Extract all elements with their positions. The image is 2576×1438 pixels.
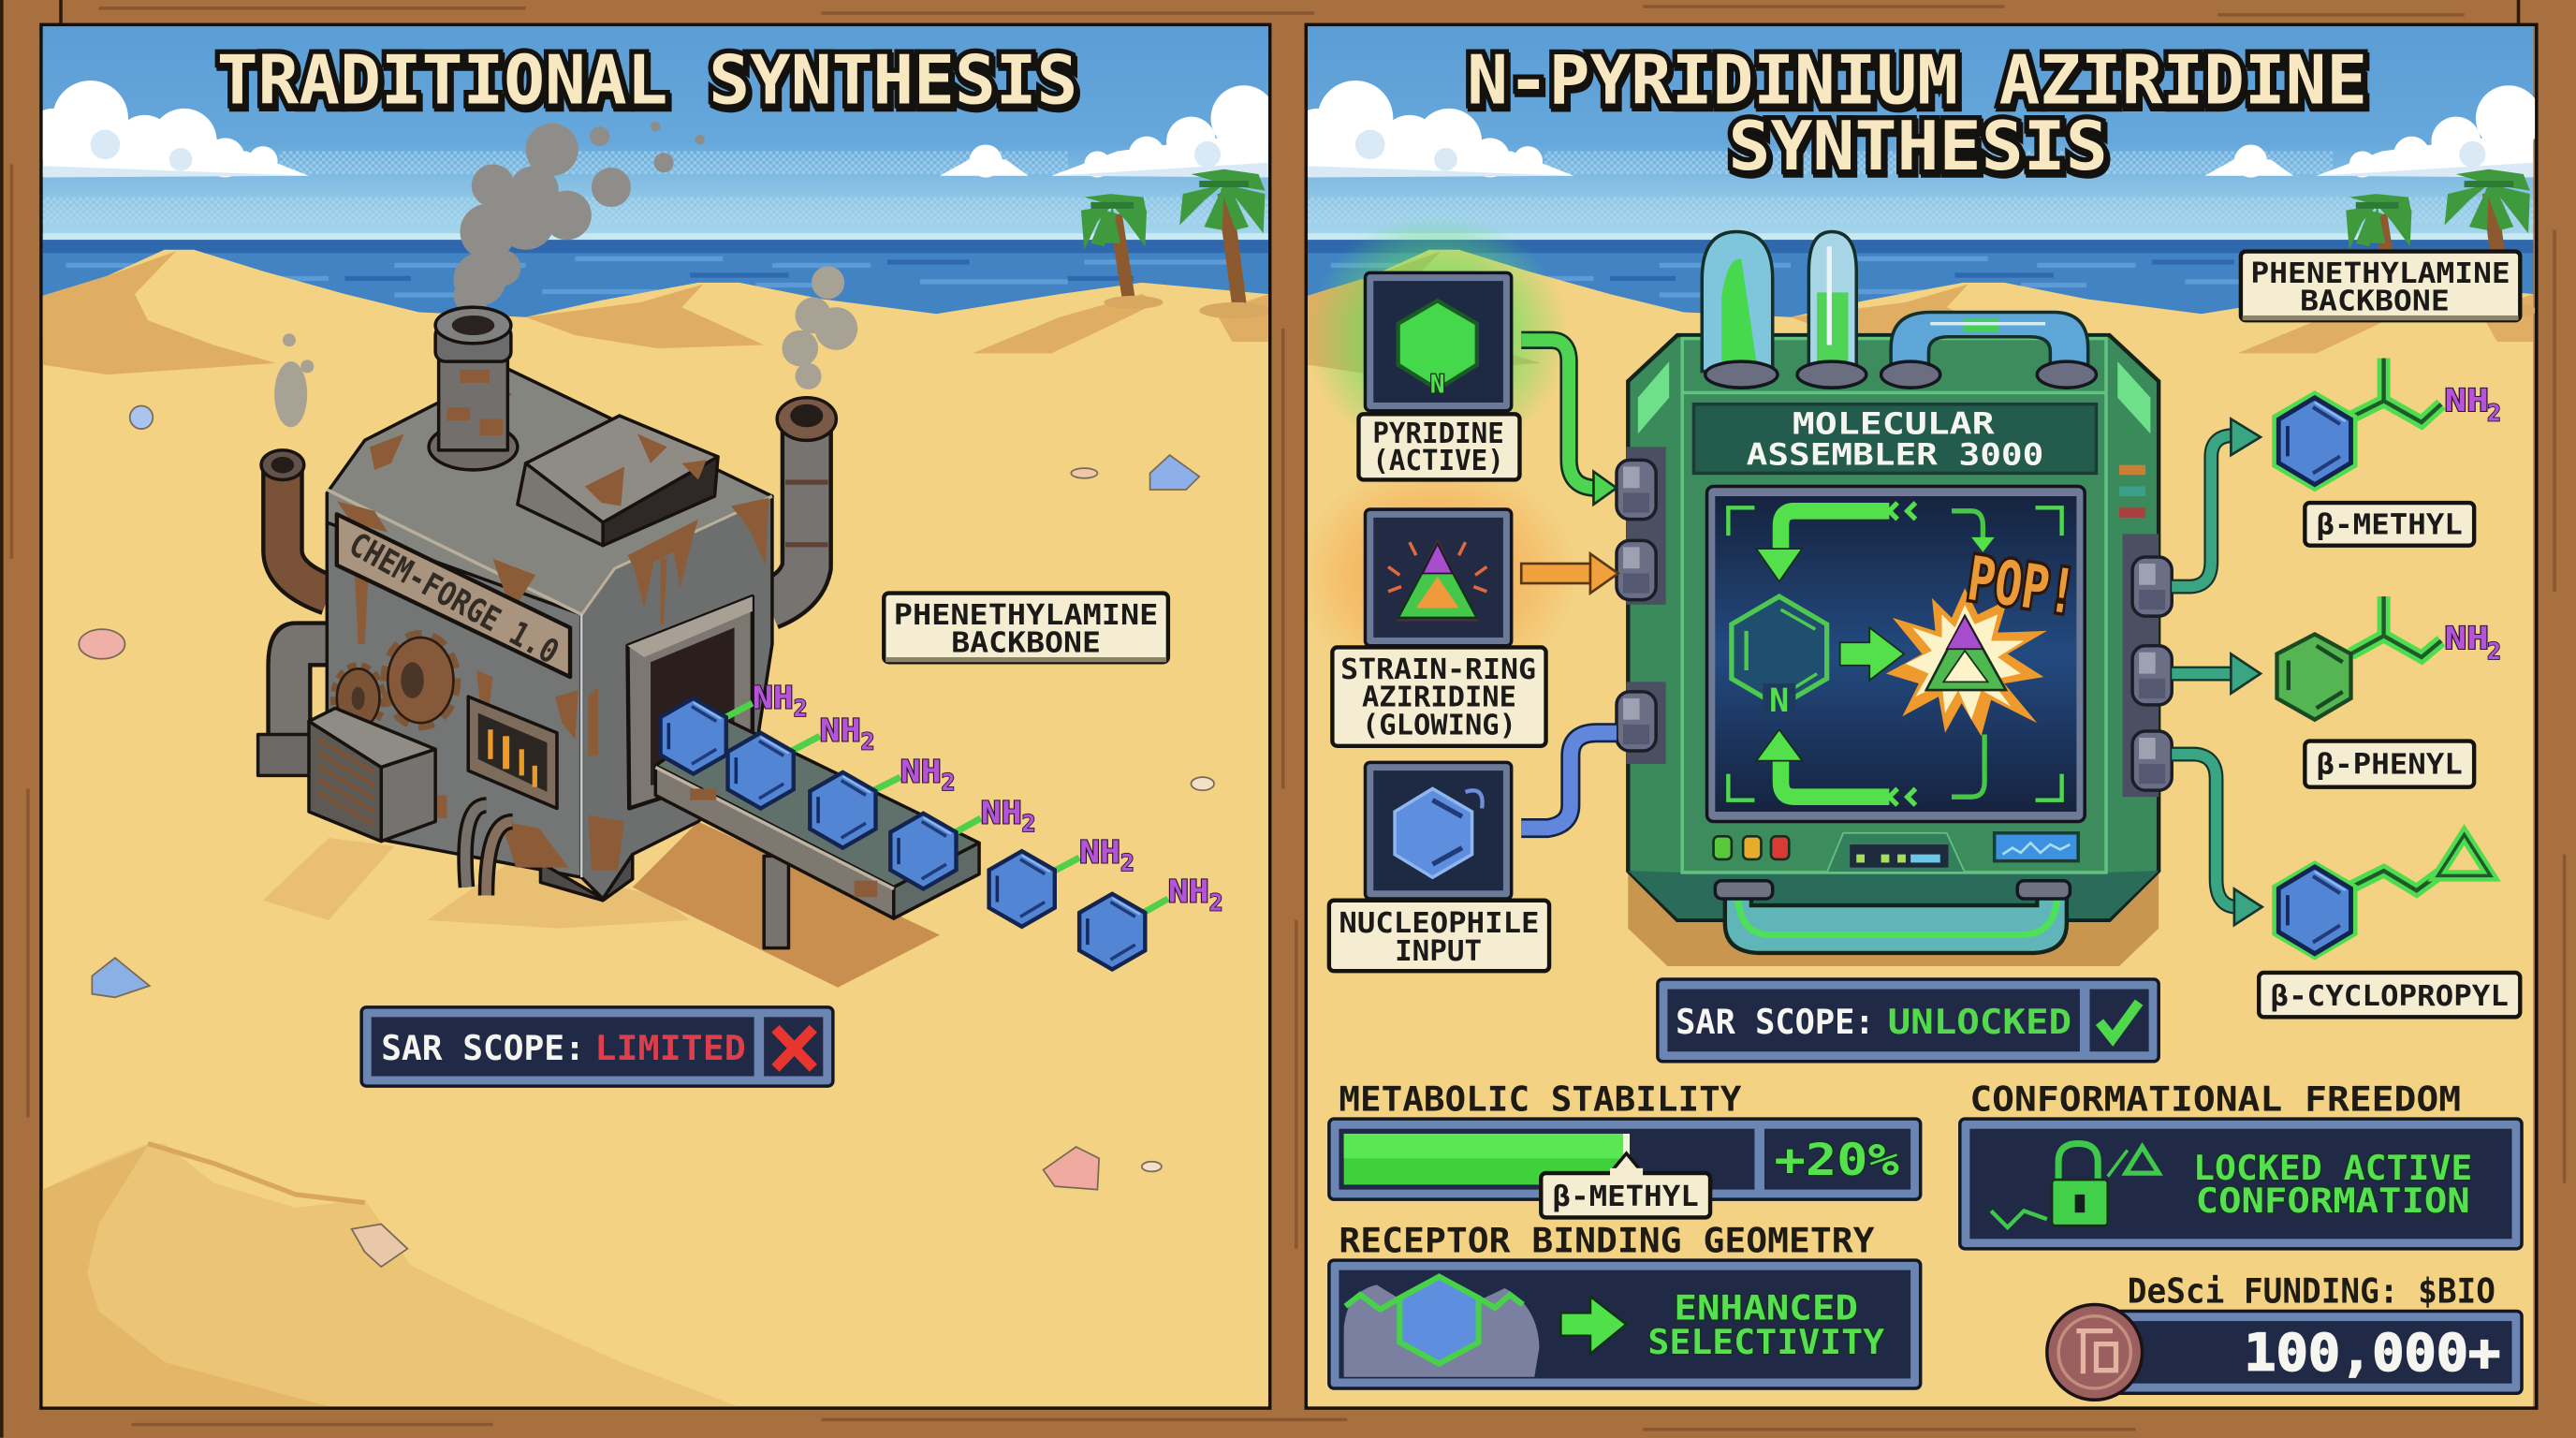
label: strain-ring aziridine glowing: AZIRIDINE xyxy=(1362,682,1516,714)
molecules: phenethylamine rings with NH2 xyxy=(661,679,1223,969)
conveyor leg xyxy=(764,856,788,948)
machine: chem-forge 1.0 xyxy=(258,307,979,948)
label: beta-phenyl: β-PHENYL xyxy=(2317,749,2463,782)
icon: pyridine card xyxy=(1365,272,1512,411)
label: nucleophile input: INPUT xyxy=(1395,935,1482,968)
progress bar: +20% xyxy=(1774,1135,1899,1186)
label: phenethylamine backbone: BACKBONE xyxy=(951,627,1101,660)
product: beta-phenyl xyxy=(2277,596,2501,787)
smoke: side pipes xyxy=(274,266,857,427)
badge: SAR scope limited xyxy=(361,1007,833,1086)
icon: green check xyxy=(2100,1003,2139,1038)
label: nucleophile input: NUCLEOPHILE xyxy=(1339,907,1540,940)
metric: receptor binding geometry xyxy=(1329,1220,1921,1388)
beta-methyl molecule: NH xyxy=(2445,382,2489,418)
beta-phenyl molecule: 2 xyxy=(2487,638,2501,665)
arrow: small top right xyxy=(1952,511,1995,552)
label: strain-ring aziridine glowing: STRAIN-RING xyxy=(1340,653,1536,686)
badge: SAR scope limited: SAR SCOPE: xyxy=(381,1028,585,1068)
funding amount panel xyxy=(2111,1312,2522,1393)
left elbow pipe xyxy=(261,450,329,594)
small drain pipes xyxy=(465,805,513,895)
metric: conformational freedom xyxy=(1960,1078,2522,1249)
heading: traditional synthesis: TRADITIONAL SYNTHESIS xyxy=(218,44,1079,123)
indicator lights xyxy=(1714,836,1789,859)
arrow: top loop xyxy=(1756,503,1915,581)
input: pyridine xyxy=(1358,272,1519,479)
explosion burst xyxy=(1886,588,2047,736)
product: beta-cyclopropyl xyxy=(2259,835,2520,1017)
title plate: ASSEMBLER 3000 xyxy=(1747,439,2043,473)
molecule 5: 2 xyxy=(1120,849,1134,876)
smoke: main chimney xyxy=(453,122,705,314)
molecule 6 xyxy=(1079,873,1223,969)
machine faces xyxy=(327,370,772,614)
funding amount panel: 100,000+ xyxy=(2244,1324,2500,1383)
pop text: POP! xyxy=(1963,544,2081,629)
progress bar xyxy=(1329,1119,1921,1199)
lower grey pipe xyxy=(258,644,329,775)
radiator box xyxy=(309,708,435,842)
screen corner brackets xyxy=(1728,507,2062,800)
beta-phenyl molecule: NH xyxy=(2445,620,2489,656)
label: beta-cyclopropyl: β-CYCLOPROPYL xyxy=(2271,980,2509,1013)
selectivity panel xyxy=(1329,1260,1921,1388)
label: phenethylamine backbone xyxy=(884,594,1168,662)
molecule 1: 2 xyxy=(794,695,808,722)
heading: n-pyridinium aziridine synthesis xyxy=(1467,41,2369,188)
conveyor belt xyxy=(655,718,979,918)
input: nucleophile xyxy=(1329,762,1549,971)
label: nucleophile input xyxy=(1329,901,1549,971)
heading: conformational freedom: CONFORMATIONAL FREEDOM xyxy=(1969,1078,2461,1119)
output pipes xyxy=(2172,419,2262,925)
label: pyridine active: (ACTIVE) xyxy=(1372,445,1504,477)
shells and pebbles xyxy=(79,405,1214,1267)
label: beta-methyl: β-METHYL xyxy=(2317,508,2463,541)
nameplate xyxy=(337,514,570,677)
title plate: MOLECULAR xyxy=(1793,407,1996,441)
selectivity panel: SELECTIVITY xyxy=(1647,1322,1885,1362)
bottom glass tube xyxy=(1715,881,2070,953)
selectivity panel: ENHANCED xyxy=(1674,1287,1858,1328)
lower sand dune xyxy=(43,1143,755,1413)
icon: bio coin xyxy=(2047,1304,2143,1400)
molecule 2: NH xyxy=(820,712,861,749)
label: phenethylamine backbone right: PHENETHYLAMINE xyxy=(2250,257,2510,290)
heading: n-pyridinium aziridine synthesis: N-PYRIDINIUM AZIRIDINE xyxy=(1467,41,2367,120)
badge: SAR scope unlocked: SAR SCOPE: xyxy=(1676,1002,1875,1042)
molecule 5 xyxy=(989,833,1134,927)
heading: receptor binding geometry: RECEPTOR BINDING GEOMETRY xyxy=(1339,1220,1875,1260)
pipe: nucleophile blue xyxy=(1521,733,1617,829)
machine shadow xyxy=(633,822,940,988)
molecule 2: 2 xyxy=(861,727,874,755)
arrow: selectivity xyxy=(1560,1297,1627,1354)
right elbow pipe xyxy=(768,398,836,605)
status lights small panel xyxy=(2119,465,2145,518)
machine body xyxy=(1628,335,2159,920)
panel: traditional synthesis xyxy=(26,26,1277,1413)
molecule 1: NH xyxy=(753,679,794,715)
roof box xyxy=(518,416,718,546)
beta-phenyl molecule xyxy=(2277,596,2501,720)
output pipe: beta-cyclopropyl xyxy=(2172,755,2262,925)
output pipe: beta-methyl xyxy=(2172,419,2261,587)
pipe: pyridine green xyxy=(1521,340,1617,505)
label: pyridine active: PYRIDINE xyxy=(1372,418,1504,450)
heading: n-pyridinium aziridine synthesis: SYNTHESIS xyxy=(1728,107,2108,185)
product: beta-methyl xyxy=(2276,359,2501,546)
label: strain-ring aziridine glowing: (GLOWING) xyxy=(1362,709,1516,741)
input pipes xyxy=(1521,340,1618,829)
tag: beta-methyl xyxy=(1541,1153,1710,1217)
nameplate text: CHEM-FORGE 1.0 xyxy=(343,525,565,672)
molecule 2 xyxy=(728,712,874,808)
icon: padlock with triangle xyxy=(1991,1143,2159,1227)
beach background scene xyxy=(1292,26,2541,1413)
arrow: bottom loop xyxy=(1756,729,1915,805)
heading: desci funding: DeSci FUNDING: $BIO xyxy=(2128,1271,2496,1312)
label: phenethylamine backbone right: BACKBONE xyxy=(2300,286,2450,318)
gears xyxy=(335,636,455,729)
beta-methyl molecule: 2 xyxy=(2487,399,2501,426)
input: strain-ring aziridine xyxy=(1332,509,1546,746)
door xyxy=(627,596,753,808)
heading: n-pyridinium aziridine synthesis: N-PYRIDINIUM AZIRIDINE xyxy=(1469,44,2369,123)
label: phenethylamine backbone: PHENETHYLAMINE xyxy=(894,599,1158,632)
molecule 6: NH xyxy=(1168,873,1209,910)
conformation panel xyxy=(1960,1119,2522,1249)
molecule 4: NH xyxy=(981,794,1022,830)
icon: nucleophile card xyxy=(1365,762,1512,899)
molecule 3: 2 xyxy=(942,769,955,796)
molecule 3: NH xyxy=(900,753,942,789)
panel: n-pyridinium aziridine synthesis xyxy=(1292,26,2541,1413)
label: pyridine active xyxy=(1358,414,1519,479)
feet xyxy=(540,855,633,901)
badge: SAR scope unlocked: UNLOCKED xyxy=(1888,1002,2071,1042)
badge: SAR scope unlocked xyxy=(1658,979,2159,1062)
molecule 3 xyxy=(810,753,955,848)
molecule 6: 2 xyxy=(1209,888,1223,916)
icon: receptor pocket xyxy=(1344,1277,1540,1377)
heading: traditional synthesis: TRADITIONAL SYNTHESIS xyxy=(217,41,1077,120)
side connector ports xyxy=(1617,447,2172,797)
heading: metabolic stability: METABOLIC STABILITY xyxy=(1339,1078,1742,1119)
label: beta-cyclopropyl xyxy=(2259,973,2520,1017)
label: beta-methyl xyxy=(2305,503,2474,546)
screen xyxy=(1707,486,2085,822)
label: beta-phenyl xyxy=(2305,741,2474,787)
beach background scene xyxy=(26,26,1277,1413)
beta-cyclopropyl molecule xyxy=(2276,835,2491,956)
funding: desci $BIO xyxy=(2047,1271,2522,1400)
badge: SAR scope limited: LIMITED xyxy=(594,1028,746,1068)
chimney xyxy=(429,307,518,470)
label: phenethylamine backbone right xyxy=(2241,252,2520,320)
molecule 1 xyxy=(661,679,808,774)
glows behind input icons xyxy=(1298,213,1577,690)
sand mounds under machine xyxy=(263,838,690,929)
icon: pyridine card: N xyxy=(1430,371,1445,399)
control vent xyxy=(1827,833,1965,873)
molecule 5: NH xyxy=(1079,833,1120,870)
pyridine hexagon on screen xyxy=(1732,596,1827,720)
molecule 4 xyxy=(890,794,1035,888)
furnace grate xyxy=(468,697,557,808)
glass tubes xyxy=(1702,231,2088,372)
arrow: small bottom right xyxy=(1952,734,1984,797)
machine shadow xyxy=(1628,871,2159,966)
readout display xyxy=(1995,833,2078,861)
rust patches xyxy=(337,381,768,871)
label: strain-ring aziridine glowing xyxy=(1332,647,1546,746)
machine: molecular assembler 3000 xyxy=(1617,231,2172,953)
beta-methyl molecule xyxy=(2276,359,2501,488)
arrow: pyridine to aziridine xyxy=(1840,627,1904,681)
tag: beta-methyl: β-METHYL xyxy=(1553,1181,1699,1213)
title plate xyxy=(1693,404,2096,473)
metric: metabolic stability xyxy=(1329,1078,1921,1217)
icon: red x xyxy=(775,1029,813,1068)
heading: n-pyridinium aziridine synthesis: SYNTHESIS xyxy=(1730,110,2110,188)
icon: aziridine card xyxy=(1365,509,1512,646)
molecule 4: 2 xyxy=(1022,810,1035,837)
output pipe: beta-phenyl xyxy=(2172,654,2261,694)
tube bases xyxy=(1705,361,2096,388)
conformation panel: CONFORMATION xyxy=(2196,1181,2470,1221)
pipe: aziridine orange xyxy=(1521,553,1618,594)
pyridine hexagon on screen: N xyxy=(1769,682,1789,720)
conformation panel: LOCKED ACTIVE xyxy=(2193,1148,2472,1188)
